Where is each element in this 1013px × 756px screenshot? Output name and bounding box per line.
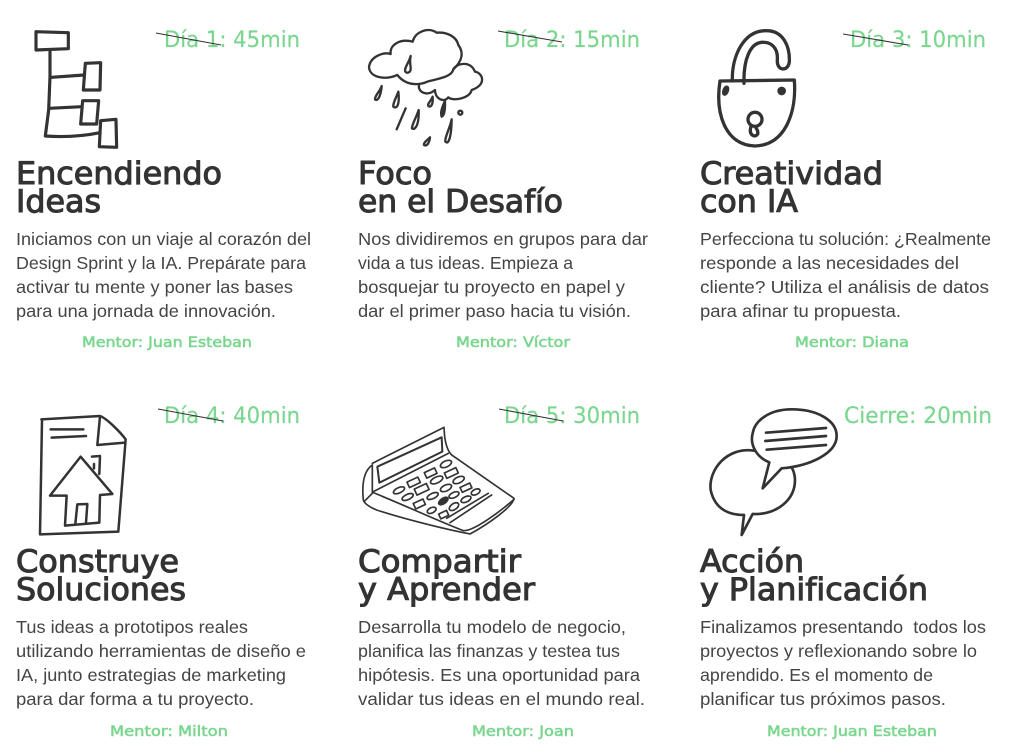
time label: Día 5: Día 5: 30min [504, 404, 640, 429]
text block: description: validar tus ideas en el mundo real. [358, 689, 645, 709]
text block: description: Nos dividiremos en grupos para dar [358, 229, 648, 249]
icon: rain cloud [369, 30, 482, 145]
icon: open padlock [719, 31, 795, 146]
heading: Foco en el Desafío: Foco [358, 156, 432, 192]
text block: description: proyectos y reflexionando sobre lo [700, 641, 977, 661]
heading: Encendiendo Ideas: Encendiendo [16, 156, 222, 192]
icon: hierarchy diagram [36, 32, 117, 147]
text block: description: IA, junto estrategias de marketing [16, 665, 286, 685]
heading: Creatividad con IA [700, 156, 883, 220]
text block: description: Design Sprint y la IA. Prepárate para [16, 253, 306, 273]
heading: Encendiendo Ideas [16, 156, 222, 220]
heading: Construye Soluciones: Soluciones [16, 572, 186, 608]
text block: description: Desarrolla tu modelo de negocio, [358, 617, 626, 637]
heading: Foco en el Desafío [358, 156, 563, 220]
text block: description: para afinar tu propuesta. [700, 301, 901, 321]
heading: Foco en el Desafío: en el Desafío [358, 184, 563, 220]
mentor: Mentor: Joan [472, 724, 574, 740]
time label: Día 4: Día 4: 40min [164, 404, 300, 429]
heading: Construye Soluciones: Construye [16, 544, 179, 580]
text block: description: para dar forma a tu proyecto. [16, 689, 254, 709]
text block: description: planifica las finanzas y testea tus [358, 641, 620, 661]
panel: Creatividad con IA [700, 28, 991, 351]
heading: Acción y Planificación [700, 544, 928, 608]
text block: description: dar el primer paso hacia tu visión. [358, 301, 631, 321]
text block: description: Tus ideas a prototipos reales [16, 617, 248, 637]
icon: calculator [363, 427, 514, 534]
text block: description: cliente? Utiliza el análisis de datos [700, 277, 989, 297]
text block: description: vida a tus ideas. Empieza a [358, 253, 573, 273]
icon: speech bubbles [710, 409, 837, 535]
text block: description: Iniciamos con un viaje al corazón del [16, 229, 311, 249]
time label: Día 2: Día 2: 15min [504, 28, 640, 53]
text block: description: hipótesis. Es una oportunidad para [358, 665, 640, 685]
heading: Acción y Planificación: y Planificación [700, 572, 928, 608]
panel: Foco en el Desafío [358, 28, 648, 351]
mentor: Mentor: Juan Esteban [82, 335, 252, 351]
text block: description [700, 617, 986, 709]
text block: description [16, 229, 311, 321]
text block: description: planificar tus próximos pasos. [700, 689, 946, 709]
panel: Construye Soluciones [16, 404, 306, 740]
heading: Compartir y Aprender: y Aprender [358, 572, 535, 608]
panel: Compartir y Aprender [358, 404, 645, 740]
icon: document with house [40, 416, 126, 534]
text block: description: responde a las necesidades del [700, 253, 959, 273]
time label: Día 3: Día 3: 10min [850, 28, 986, 53]
text block: description: Perfecciona tu solución: ¿Realmente [700, 229, 991, 249]
text block: description: activar tu mente y poner las bases [16, 277, 293, 297]
text block: description [700, 229, 991, 321]
text block: description [358, 229, 648, 321]
time label: Cierre: Cierre: 20min [844, 404, 992, 429]
heading: Encendiendo Ideas: Ideas [16, 184, 101, 220]
text block: description: bosquejar tu proyecto en papel y [358, 277, 625, 297]
text block: description [358, 617, 645, 709]
mentor: Mentor: Juan Esteban [767, 724, 937, 740]
text block: description: utilizando herramientas de diseño e [16, 641, 306, 661]
text block: description: para una jornada de innovación. [16, 301, 276, 321]
panel: Acción y Planificación [700, 404, 992, 740]
heading: Compartir y Aprender: Compartir [358, 544, 521, 580]
heading: Creatividad con IA: con IA [700, 184, 798, 220]
text block: description: Finalizamos presentando todos los [700, 617, 986, 637]
text block: description: aprendido. Es el momento de [700, 665, 933, 685]
heading: Construye Soluciones [16, 544, 186, 608]
heading: Creatividad con IA: Creatividad [700, 156, 883, 192]
heading: Compartir y Aprender [358, 544, 535, 608]
heading: Acción y Planificación: Acción [700, 544, 804, 580]
time label: Día 1: Día 1: 45min [164, 28, 300, 53]
mentor: Mentor: Víctor [456, 335, 570, 351]
mentor: Mentor: Diana [795, 335, 909, 351]
panel: Encendiendo Ideas [16, 28, 311, 351]
mentor: Mentor: Milton [110, 724, 228, 740]
text block: description [16, 617, 306, 709]
